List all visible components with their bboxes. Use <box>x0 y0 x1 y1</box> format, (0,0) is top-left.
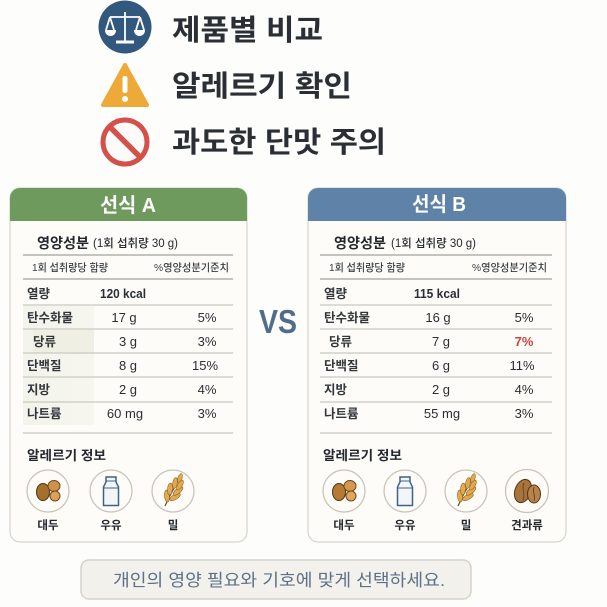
nutrition table B: 2 g <box>432 382 450 397</box>
nutrition table B: 7% <box>515 334 534 349</box>
icon: warning triangle <box>103 65 147 105</box>
heading: excessive sweetness warning: 과도한 단맛 주의 <box>172 126 386 159</box>
icon: balance scale <box>98 0 152 54</box>
allergen: milk A <box>90 470 132 532</box>
allergen: wheat B: 밀 <box>461 519 471 532</box>
allergen: soybean B <box>323 470 365 532</box>
nutrition table B: 11% <box>509 358 535 373</box>
nutrition table A: 15% <box>192 358 218 373</box>
nutrition table A: 60 mg <box>107 406 143 421</box>
nutrition table B: %영양성분기준치 <box>472 261 547 274</box>
nutrition table A <box>23 235 233 433</box>
nutrition table B: 4% <box>515 382 534 397</box>
nutrition table A: 2 g <box>119 382 137 397</box>
callout: footer note <box>81 560 471 599</box>
nutrition table B: 3% <box>515 406 534 421</box>
nutrition table A: 지방 <box>27 383 51 397</box>
nutrition table B: 16 g <box>425 310 451 325</box>
allergen: wheat B <box>445 470 487 532</box>
allergen: milk B <box>384 470 426 532</box>
panel: snack A <box>10 188 247 542</box>
nutrition table B: 7 g <box>432 334 450 349</box>
allergen: milk B: 우유 <box>394 519 416 532</box>
panel header: snack B <box>308 188 566 221</box>
nutrition table B: (1회 섭취량 30 g) <box>391 236 476 250</box>
nutrition table A: 17 g <box>111 310 137 325</box>
allergen: wheat A: 밀 <box>168 519 178 532</box>
allergen: tree nuts B: 견과류 <box>511 518 543 532</box>
nutrition table B: 지방 <box>324 383 348 397</box>
allergy heading B: 알레르기 정보 <box>323 448 402 463</box>
allergen: soybean A <box>27 470 69 532</box>
nutrition table B: 열량 <box>324 286 348 301</box>
nutrition table A: %영양성분기준치 <box>154 261 229 274</box>
nutrition table A: 당류 <box>33 335 56 349</box>
nutrition table A: (1회 섭취량 30 g) <box>93 236 178 250</box>
nutrition table B: 영양성분 <box>334 235 386 251</box>
VS label: VS <box>259 303 297 340</box>
nutrition table B: 1회 섭취량당 함량 <box>329 261 405 274</box>
nutrition table A: 열량 <box>27 286 51 301</box>
nutrition table B: 55 mg <box>424 406 460 421</box>
allergen: soybean A: 대두 <box>37 518 59 532</box>
allergen: soybean B: 대두 <box>333 518 355 532</box>
nutrition table B: 나트륨 <box>324 407 359 421</box>
nutrition table B: 5% <box>515 310 534 325</box>
nutrition table B: 당류 <box>329 335 352 349</box>
nutrition table B: 115 kcal <box>414 286 460 301</box>
nutrition table A: 나트륨 <box>27 407 62 421</box>
allergen: tree nuts B <box>506 470 548 532</box>
panel header: snack B: 선식 B <box>412 193 466 216</box>
nutrition table B: 탄수화물 <box>324 310 370 325</box>
nutrition table A: 5% <box>198 310 217 325</box>
nutrition table A: 120 kcal <box>100 286 146 301</box>
heading: allergy check: 알레르기 확인 <box>172 70 352 103</box>
nutrition table B: 6 g <box>432 358 450 373</box>
nutrition table A: 1회 섭취량당 함량 <box>32 261 108 274</box>
heading: product comparison: 제품별 비교 <box>172 14 323 47</box>
icon: prohibition sign <box>103 120 147 164</box>
nutrition table A: 3% <box>198 406 217 421</box>
callout: footer note: 개인의 영양 필요와 기호에 맞게 선택하세요. <box>113 571 445 590</box>
allergen: wheat A <box>152 470 194 532</box>
nutrition table A: 4% <box>198 382 217 397</box>
allergy heading A: 알레르기 정보 <box>27 448 106 463</box>
nutrition table A: 단백질 <box>27 359 62 373</box>
nutrition table B <box>320 235 552 433</box>
panel header: snack A <box>10 188 247 221</box>
nutrition table B: 단백질 <box>324 359 359 373</box>
nutrition table A: 영양성분 <box>37 235 89 251</box>
allergen: milk A: 우유 <box>100 519 122 532</box>
panel: snack B <box>308 188 566 542</box>
nutrition table A: 탄수화물 <box>27 310 73 325</box>
nutrition table A: 8 g <box>119 358 137 373</box>
nutrition table A: 3% <box>198 334 217 349</box>
nutrition table A: 3 g <box>119 334 137 349</box>
panel header: snack A: 선식 A <box>100 194 156 217</box>
